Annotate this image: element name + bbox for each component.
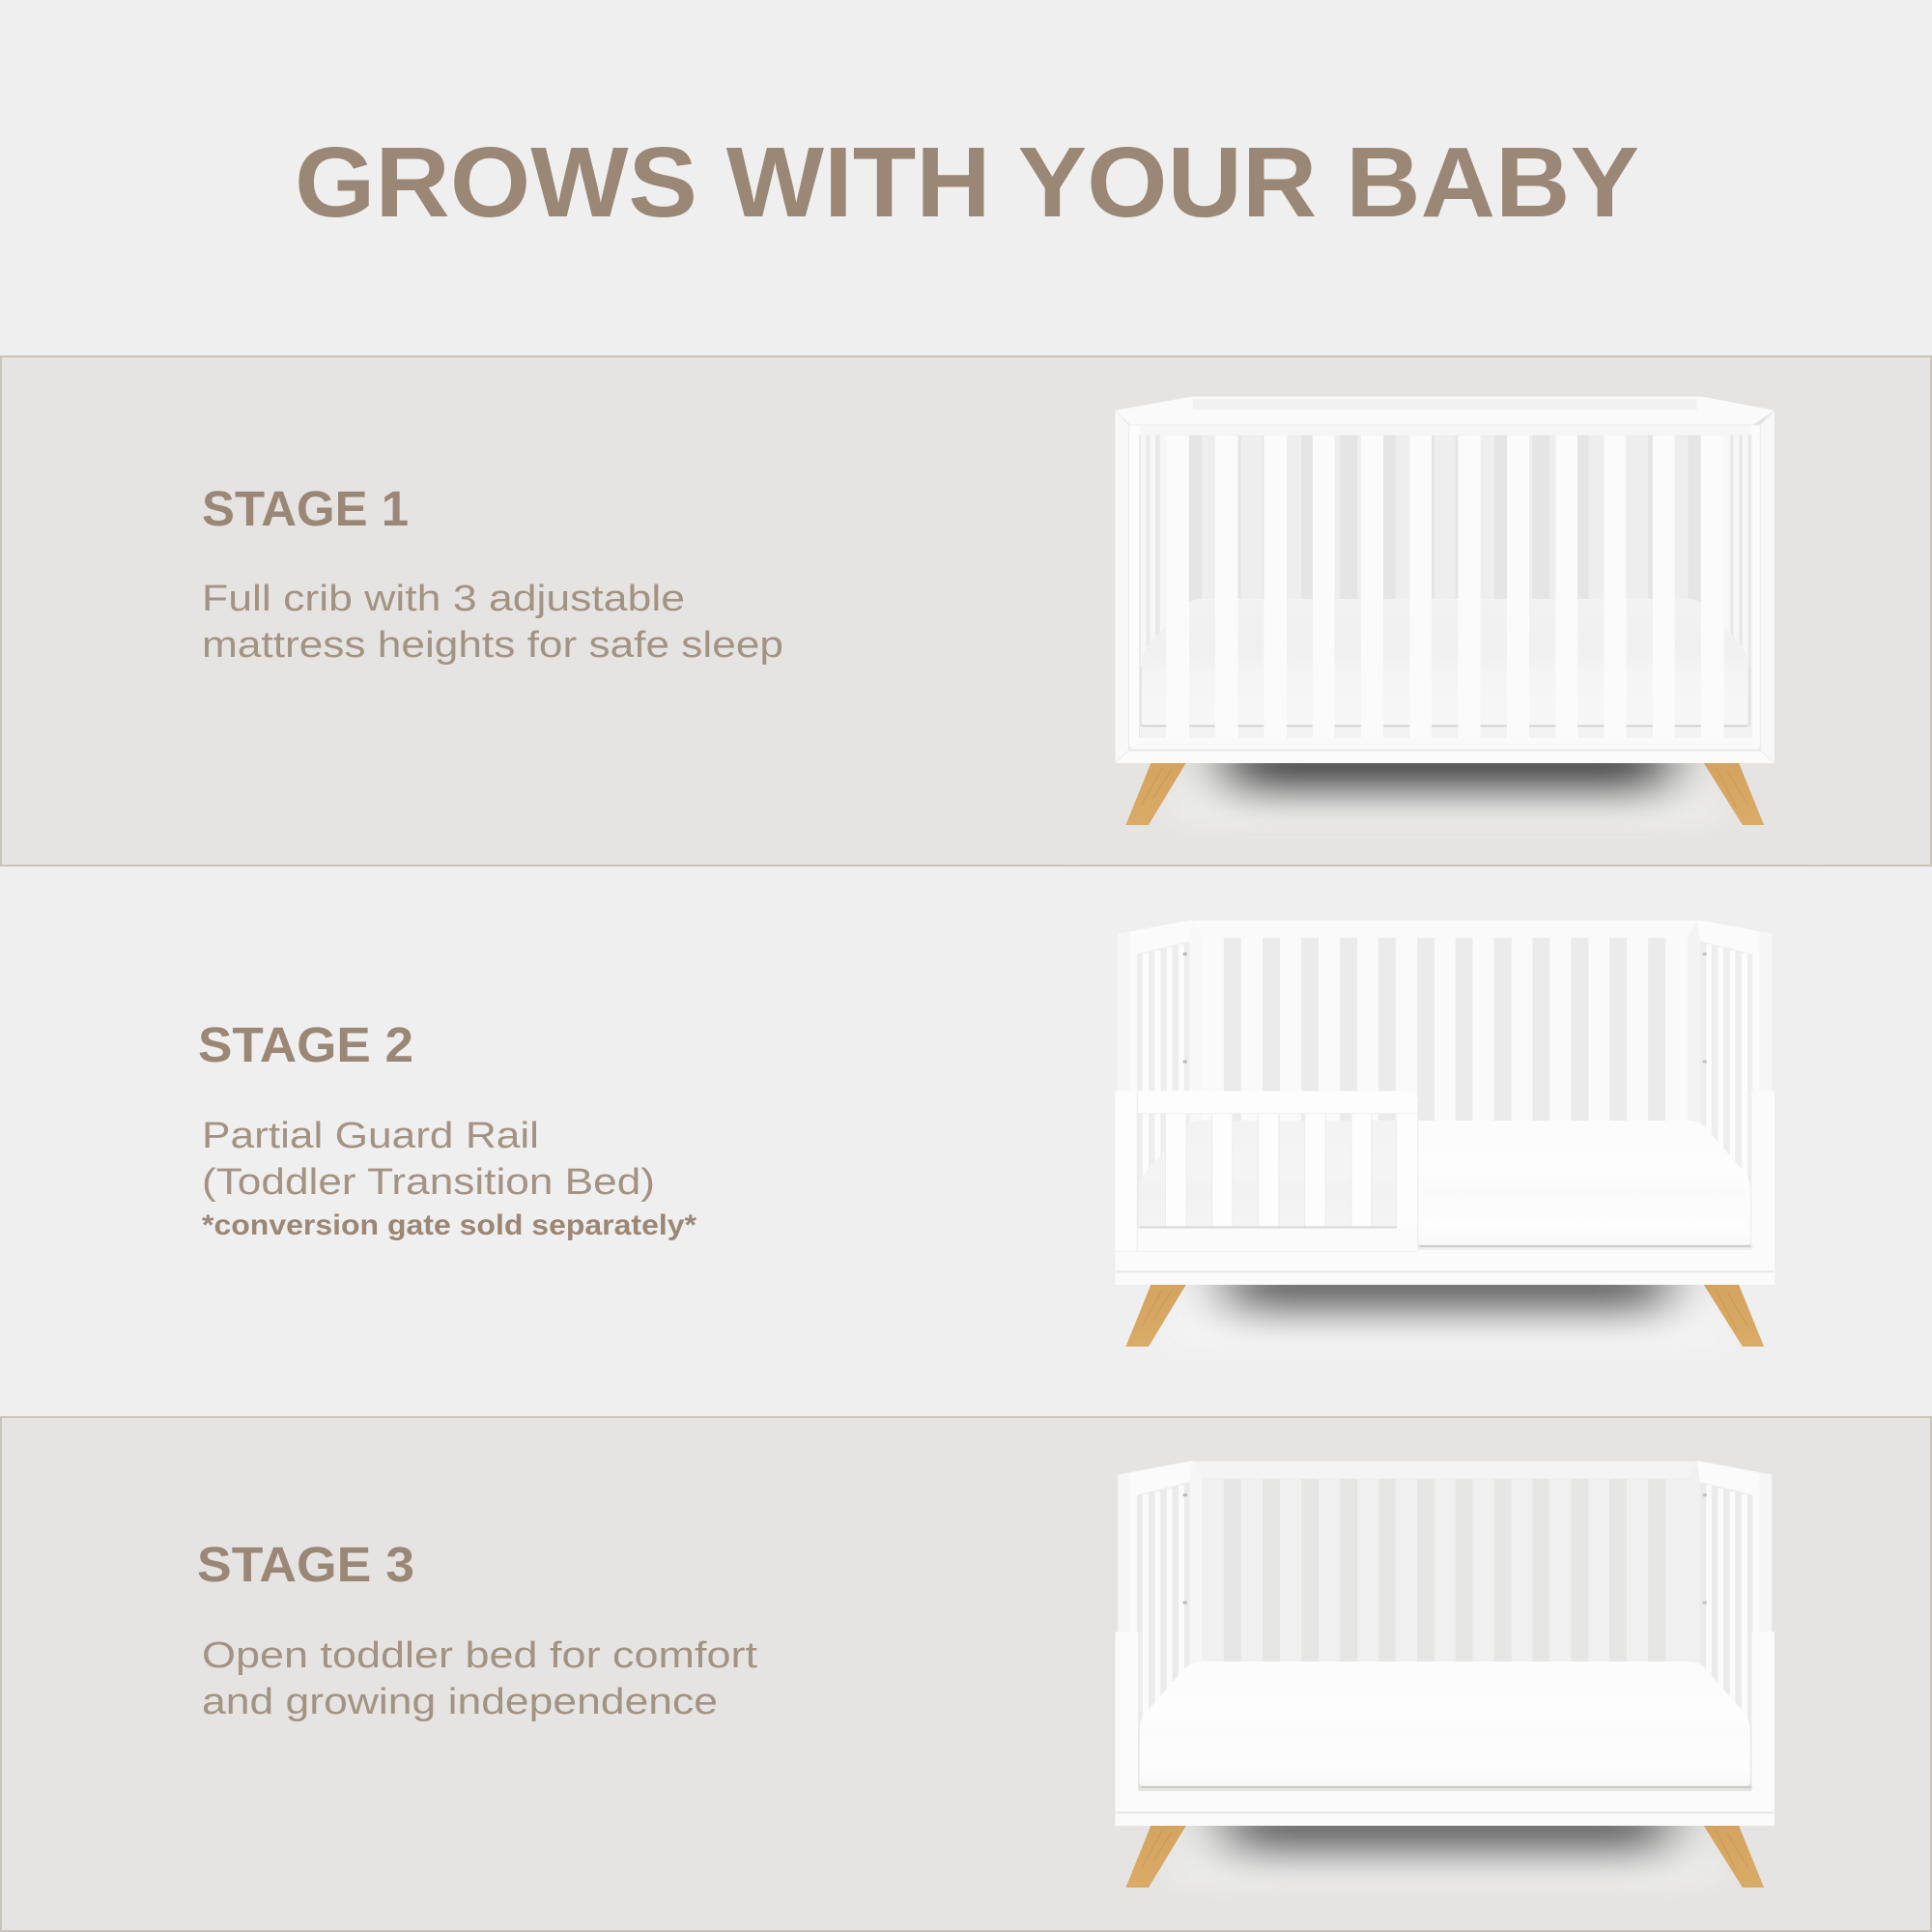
illustration: toddler bed with guard rail: [1116, 920, 1775, 1347]
floor shadow: [1190, 1285, 1704, 1335]
guard rail: [1116, 1091, 1418, 1251]
left side panel: [1118, 920, 1202, 1188]
illustration: full crib: [1116, 397, 1775, 825]
crib legs: [1125, 1826, 1764, 1888]
mattress: [1142, 599, 1748, 726]
side slats: [1140, 435, 1751, 667]
back top rail: [1117, 397, 1774, 411]
left side panel: [1118, 1461, 1202, 1729]
mattress: [1140, 1662, 1751, 1788]
text block: stage 2 description: [202, 1116, 696, 1241]
right lower post: [1751, 1091, 1775, 1252]
back wall: [1193, 1462, 1697, 1662]
base rail: [1116, 1791, 1775, 1826]
mattress: [1140, 1121, 1751, 1247]
text block: stage 2 description: (Toddler Transition Bed): [202, 1162, 655, 1203]
title: GROWS WITH YOUR BABY: [295, 127, 1639, 238]
text block: stage 3 description: and growing independence: [202, 1682, 718, 1722]
back wall slats: [1140, 435, 1751, 601]
heading: stage 3: STAGE 3: [197, 1537, 414, 1592]
lower rail: [1140, 726, 1751, 738]
text block: stage 1 description: mattress heights for safe sleep: [202, 625, 783, 666]
illustration: open toddler bed: [1116, 1461, 1775, 1888]
text block: stage 3 description: Open toddler bed for comfort: [202, 1635, 758, 1676]
heading: stage 1: STAGE 1: [202, 481, 409, 536]
crib legs: [1125, 1285, 1764, 1347]
panel: stage 3: [1, 1417, 1931, 1931]
right side panel: [1688, 1461, 1772, 1729]
heading: stage 2: STAGE 2: [198, 1017, 413, 1072]
text block: stage 3 description: [202, 1635, 758, 1722]
text block: stage 2 description: Partial Guard Rail: [202, 1116, 539, 1156]
base rail: [1116, 1250, 1775, 1285]
front slats: [1166, 436, 1724, 738]
panel: stage 2: [198, 920, 1775, 1347]
floor shadow: [1188, 763, 1704, 812]
text block: stage 2 description: *conversion gate sold separately*: [202, 1209, 696, 1241]
back wall: [1193, 921, 1697, 1122]
floor shadow: [1192, 1826, 1703, 1872]
text block: stage 1 description: Full crib with 3 adjustable: [202, 579, 685, 619]
crib legs: [1125, 763, 1764, 825]
panel: stage 1: [1, 356, 1931, 866]
crib frame: [1116, 411, 1775, 763]
text block: stage 1 description: [202, 579, 783, 666]
right side panel: [1688, 920, 1772, 1188]
lower posts: [1116, 1632, 1775, 1793]
